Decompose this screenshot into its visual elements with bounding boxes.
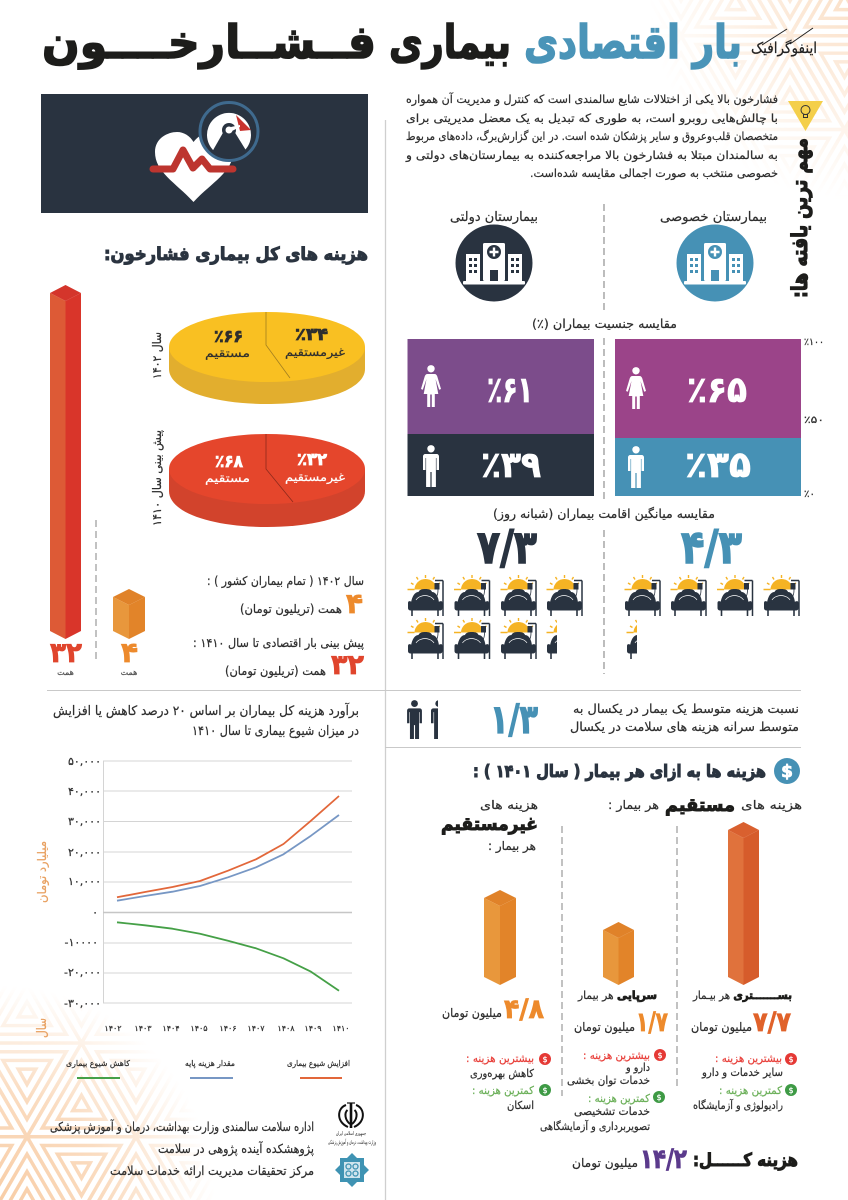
column: outpatient: کمترین هزینه : <box>588 1092 651 1105</box>
axis title: billion toman: میلیارد تومان <box>35 841 50 903</box>
text: cost 1402: ۴ <box>346 587 363 620</box>
pie: year 1402: ٪۳۴ <box>295 325 328 345</box>
x axis labels: ۱۴۰۲ <box>104 1024 122 1033</box>
icon: female <box>626 367 646 409</box>
logo: ministry emblem <box>328 1103 376 1146</box>
source credits: پژوهشکده آینده پژوهی در سلامت <box>158 1141 314 1157</box>
y axis labels: ۴۰,۰۰۰ <box>68 785 101 798</box>
x axis labels: ۱۴۰۷ <box>247 1024 265 1033</box>
text: chart description: در میزان شیوع بیماری تا سال ۱۴۱۰ <box>192 724 359 739</box>
text: cost forecast 1410: همت (تریلیون تومان) <box>225 664 326 679</box>
pie: forecast 1410: ٪۳۲ <box>297 450 328 470</box>
logo: research institute <box>335 1153 369 1187</box>
text: cost 1402: سال ۱۴۰۲ ( تمام بیماران کشور ) : <box>207 574 364 589</box>
total cost: هزینه کــــــل: <box>693 1150 798 1171</box>
pie: year 1402: غیرمستقیم <box>285 345 345 360</box>
text: cost forecast 1410: ۳۲ <box>331 648 364 681</box>
icon: dollar: $ <box>781 762 793 782</box>
text: ratio description: متوسط سرانه هزینه های سلامت در یکسال <box>570 719 799 735</box>
column: outpatient <box>540 922 668 1133</box>
source credits <box>50 1119 314 1179</box>
icon: max cost: $ <box>657 1051 663 1060</box>
bar: indirect <box>484 890 516 985</box>
column: inpatient: رادیولوژی و آزمایشگاه <box>693 1098 783 1112</box>
column: inpatient: بســـــــتری هر بیـمار <box>692 989 792 1002</box>
column: outpatient: بیشترین هزینه : <box>583 1049 650 1062</box>
logo: ministry emblem: جمهوری اسلامی ایران <box>336 1131 366 1137</box>
icon: max cost: $ <box>788 1055 794 1064</box>
total cost: میلیون تومان <box>572 1156 638 1171</box>
total cost: ۱۴/۲ <box>640 1144 687 1175</box>
title: بار اقتصادی <box>524 15 742 69</box>
x axis labels: ۱۴۰۵ <box>190 1024 208 1033</box>
icon: female <box>421 365 441 407</box>
series: increased prevalence <box>117 796 339 897</box>
icon: min cost <box>653 1091 665 1103</box>
column: inpatient: بیشترین هزینه : <box>715 1052 782 1065</box>
bar: 32 hemmat <box>50 285 82 677</box>
bar: 32 hemmat: همت <box>57 668 74 677</box>
text: ratio description: نسبت هزینه متوسط یک بیمار در یکسال به <box>573 701 799 717</box>
icon: dollar <box>774 758 800 784</box>
icon: min cost <box>785 1084 797 1096</box>
y axis labels: ۲۰,۰۰۰ <box>68 846 101 859</box>
column: indirect: ۴/۸ <box>504 994 544 1025</box>
icon: male <box>628 446 644 488</box>
series: baseline <box>117 815 339 901</box>
bar: 4 hemmat: همت <box>121 668 137 677</box>
column: outpatient: خدمات تشخیصی <box>574 1105 650 1118</box>
icon: max cost <box>785 1053 797 1065</box>
column: inpatient: کمترین هزینه : <box>719 1084 783 1097</box>
column: outpatient: خدمات توان بخشی <box>567 1074 650 1087</box>
logo: infographic wordmark <box>751 28 817 57</box>
axis title: year: سال <box>35 1018 50 1038</box>
logo: infographic wordmark: اینفوگرافیک <box>751 39 817 57</box>
x axis labels: ۱۴۰۶ <box>219 1024 237 1033</box>
icons: public hospital bed days <box>408 575 582 659</box>
heading: length of stay: مقایسه میانگین اقامت بیماران (شبانه روز) <box>493 506 715 522</box>
column: inpatient: ۷/۷ <box>753 1007 791 1038</box>
line chart <box>64 755 352 1033</box>
pie: year 1402: ٪۶۶ <box>214 327 243 347</box>
pie: forecast 1410: مستقیم <box>205 471 250 485</box>
heading: direct costs <box>608 795 802 816</box>
private hospital header <box>660 210 767 302</box>
pie: forecast 1410: ٪۶۸ <box>215 452 244 472</box>
chart: gender public hospital: ٪۶۱ <box>487 370 533 411</box>
percent axis: ٪۵۰ <box>804 415 824 426</box>
icon: min cost: $ <box>788 1086 794 1095</box>
icon: min cost <box>539 1084 551 1096</box>
source credits: اداره سلامت سالمندی وزارت بهداشت، درمان و آموزش پزشکی <box>50 1119 314 1135</box>
y axis labels: -۲۰,۰۰۰ <box>64 966 101 979</box>
title: بیماری <box>389 15 511 69</box>
intro text: با چالش‌هایی روبرو است، به طوری که تبدیل به یک معضل مدیریتی برای <box>406 111 778 126</box>
text: cost 1402: همت (تریلیون تومان) <box>240 602 342 617</box>
text: chart description <box>53 702 359 739</box>
intro text <box>405 92 778 181</box>
y axis labels: -۳۰,۰۰۰ <box>64 997 101 1010</box>
y axis labels: ۵۰,۰۰۰ <box>68 755 101 768</box>
x axis labels: ۱۴۰۳ <box>134 1024 152 1033</box>
bar: outpatient <box>603 922 634 985</box>
intro text: متخصصان قلب‌وعروق و سایر پزشکان شده است. در این گزارش‌برگ، داده‌های مربوط <box>406 129 778 144</box>
icon: blood pressure gauge <box>200 102 258 160</box>
percent axis: ٪۱۰۰ <box>804 337 824 348</box>
chart: gender private hospital: ٪۶۵ <box>687 370 747 411</box>
chart legend: مقدار هزینه پایه <box>185 1059 235 1068</box>
title <box>42 15 742 69</box>
total cost <box>572 1144 798 1175</box>
heading: gender comparison: مقایسه جنسیت بیماران (٪) <box>532 316 677 332</box>
chart: gender public hospital: ٪۳۹ <box>481 445 541 486</box>
stat: public stay: ۷/۳ <box>477 520 537 574</box>
x axis labels: ۱۴۰۸ <box>277 1024 295 1033</box>
x axis labels <box>104 1024 350 1033</box>
column: indirect <box>442 890 551 1112</box>
pie: forecast 1410: غیرمستقیم <box>285 470 345 485</box>
chart: gender public hospital <box>408 339 594 496</box>
intro text: خصوصی منتخب به صورت اجمالی مقایسه شده‌است. <box>530 166 778 181</box>
icon: max cost <box>539 1053 551 1065</box>
column: indirect: کاهش بهره‌وری <box>470 1067 535 1080</box>
column: inpatient <box>691 822 797 1112</box>
pie: year 1402 <box>169 312 365 404</box>
heading: cost per patient: هزینه ها به ازای هر بیمار ( سال ۱۴۰۱ ) : <box>473 762 766 782</box>
icons: private hospital bed days <box>624 575 799 659</box>
text: ratio description <box>570 701 799 735</box>
chart legend: کاهش شیوع بیماری <box>66 1059 130 1068</box>
title: فــشــارخــــون <box>42 15 376 69</box>
label: year 1402: سال ۱۴۰۲ <box>150 332 164 379</box>
y axis labels: ۱۰,۰۰۰ <box>68 875 101 888</box>
column: inpatient: سایر خدمات و دارو <box>701 1066 783 1079</box>
column: outpatient: میلیون تومان <box>574 1020 635 1035</box>
public hospital header: بیمارستان دولتی <box>450 210 538 225</box>
y axis labels: -۱۰۰۰۰ <box>64 936 98 949</box>
column: indirect: میلیون تومان <box>442 1006 502 1021</box>
heading: key findings (vertical): مهم ترین یافته ها: <box>788 138 813 298</box>
column: outpatient: ۱/۷ <box>636 1007 668 1038</box>
icon: light bulb badge <box>788 101 823 131</box>
stat: private stay: ۴/۳ <box>681 520 742 574</box>
x axis labels: ۱۴۰۴ <box>162 1024 180 1033</box>
x axis labels: ۱۴۰۹ <box>304 1024 322 1033</box>
y axis labels: ۰ <box>92 906 98 919</box>
text: chart description: برآورد هزینه کل بیماران بر اساس ۲۰ درصد کاهش یا افزایش <box>53 702 359 719</box>
chart legend <box>66 1059 350 1079</box>
column: inpatient: میلیون تومان <box>691 1020 752 1035</box>
heading: total costs: هزینه های کل بیماری فشارخون: <box>104 244 368 265</box>
chart: gender private hospital <box>615 339 801 496</box>
logo: ministry emblem: وزارت بهداشت، درمان و آموزش پزشکی <box>328 1139 376 1146</box>
public hospital header <box>450 210 538 302</box>
bar: 4 hemmat: ۴ <box>121 636 138 669</box>
icon: max cost <box>654 1049 666 1061</box>
column: indirect: کمترین هزینه : <box>472 1084 535 1097</box>
bar: 4 hemmat <box>113 589 145 677</box>
bar: 32 hemmat: ۳۲ <box>50 636 82 669</box>
text: cost 1402 <box>207 574 364 620</box>
heading: direct costs: مستقیم <box>665 795 735 816</box>
source credits: مرکز تحقیقات مدیریت ارائه خدمات سلامت <box>110 1163 314 1179</box>
icon: male <box>423 445 439 487</box>
heading: indirect costs <box>441 798 538 854</box>
percent axis: ٪۰ <box>804 489 815 500</box>
chart: gender private hospital: ٪۳۵ <box>685 445 751 486</box>
heading: indirect costs: هزینه های <box>480 798 538 813</box>
background pattern <box>0 1000 201 1200</box>
icon: person ratio <box>407 700 447 739</box>
y axis labels <box>64 755 101 1010</box>
label: forecast 1410: پیش بینی سال ۱۴۱۰ <box>150 430 165 526</box>
heading: indirect costs: هر بیمار : <box>488 839 536 854</box>
series: decreased prevalence <box>117 922 339 991</box>
chart legend: افزایش شیوع بیماری <box>287 1059 350 1068</box>
intro text: فشارخون بالا یکی از اختلالات شایع سالمندی است که کنترل و مدیریت آن همواره <box>406 92 778 107</box>
column: indirect: اسکان <box>507 1099 534 1112</box>
icon: heart with ECG <box>153 132 233 202</box>
icon: min cost: $ <box>656 1093 662 1102</box>
column: outpatient: سرپایی هر بیمار <box>577 989 657 1002</box>
hero illustration panel <box>41 94 368 213</box>
bar: inpatient <box>728 822 759 985</box>
column: outpatient: تصویربرداری و آزمایشگاهی <box>540 1119 650 1133</box>
percent axis <box>804 337 824 500</box>
intro text: به سالمندان مبتلا به فشارخون بالا مراجعه‌کننده به بیمارستان‌های دولتی و <box>405 148 778 163</box>
heading: direct costs: هر بیمار : <box>608 798 659 813</box>
icon: min cost: $ <box>542 1086 548 1095</box>
private hospital header: بیمارستان خصوصی <box>660 210 767 225</box>
column: outpatient: دارو و <box>625 1061 650 1074</box>
heading: direct costs: هزینه های <box>741 798 802 813</box>
x axis labels: ۱۴۱۰ <box>332 1024 350 1033</box>
stat: ratio: ۱/۳ <box>490 697 538 743</box>
column: indirect: بیشترین هزینه : <box>466 1052 534 1065</box>
text: cost forecast 1410: پیش بینی بار اقتصادی تا سال ۱۴۱۰ : <box>193 636 364 651</box>
icon: max cost: $ <box>542 1055 548 1064</box>
pie: year 1402: مستقیم <box>205 346 250 360</box>
text: cost forecast 1410 <box>193 636 364 681</box>
heading: indirect costs: غیرمستقیم <box>441 814 538 835</box>
pie: forecast 1410 <box>169 434 365 527</box>
y axis labels: ۳۰,۰۰۰ <box>68 815 101 828</box>
